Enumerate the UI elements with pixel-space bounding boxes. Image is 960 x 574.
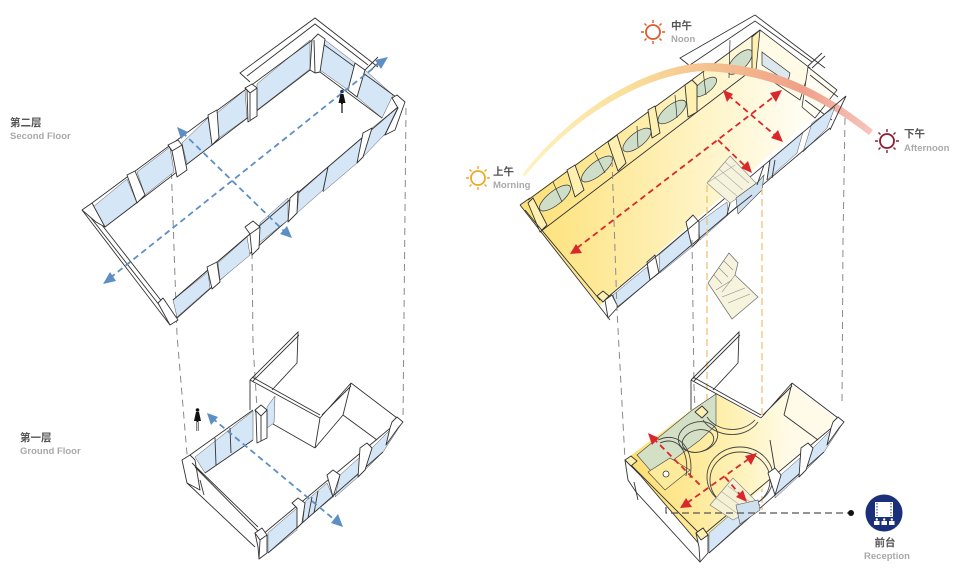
- front wall glazing: [173, 107, 398, 317]
- label: morning: 上午: [493, 165, 514, 178]
- diagram: second floor daylight plan: [520, 15, 873, 320]
- label: noon: 中午: [671, 19, 692, 32]
- back wall piers: [528, 30, 765, 232]
- front wall glazing: [613, 107, 835, 307]
- back wall edge lines: [528, 30, 760, 232]
- wall edge lines: [92, 38, 398, 318]
- left wall: [182, 455, 258, 547]
- icon: reception badge: [866, 494, 902, 532]
- yellow lit floor and back wall: [520, 30, 832, 306]
- dashed circulation arrow: [207, 413, 343, 527]
- back glazing: [190, 396, 275, 473]
- front wall piers: [207, 95, 405, 289]
- callout line: reception: [666, 507, 854, 516]
- heading: ground floor: Ground Floor: [20, 446, 81, 457]
- roof outline strip: [240, 18, 381, 82]
- heading: ground floor: [20, 431, 81, 457]
- label: noon: Noon: [671, 34, 695, 45]
- dashed red arrows: [570, 90, 783, 254]
- label: afternoon: Afternoon: [904, 143, 950, 154]
- dashed red arrows: [648, 433, 757, 508]
- stair and door: [707, 156, 775, 215]
- back wall piers: [127, 34, 365, 203]
- left wall: [625, 456, 700, 562]
- room walls: [691, 377, 838, 470]
- front glazing: [262, 420, 402, 553]
- front piers: [695, 406, 844, 562]
- front wall piers and outer edge: [520, 96, 846, 318]
- label: afternoon: [904, 127, 950, 154]
- icon: afternoon sun: [875, 129, 899, 153]
- icon: noon sun: [641, 20, 665, 44]
- sun arc: [522, 63, 873, 176]
- label: morning: Morning: [493, 180, 531, 191]
- dashed circulation arrows: [103, 57, 388, 284]
- roof outline strip: [520, 15, 825, 320]
- projection lines, right diagrams: [612, 118, 845, 530]
- front piers: [255, 417, 403, 559]
- icon: person: [338, 90, 346, 113]
- end wall and corners: [82, 203, 178, 325]
- label: reception: Reception: [864, 551, 910, 562]
- gray projection lines, left diagrams: [171, 108, 406, 478]
- diagram: ground floor plan: [182, 332, 403, 559]
- heading: second floor: [10, 116, 71, 142]
- heading: second floor: Second Floor: [10, 131, 71, 142]
- partition walls: [691, 332, 740, 410]
- pier: [255, 405, 267, 443]
- diagram: ground floor daylight plan: [625, 332, 844, 562]
- label: morning: [493, 165, 531, 191]
- diagram: loose stair: [708, 253, 758, 319]
- label: afternoon: 下午: [904, 127, 925, 140]
- elliptical windows: [536, 40, 756, 215]
- icon: person: [194, 408, 201, 431]
- heading: second floor: 第二层: [10, 116, 42, 129]
- partition walls: [250, 332, 397, 448]
- icon: morning sun: [466, 166, 490, 190]
- back wall glazing: [93, 40, 393, 227]
- heading: ground floor: 第一层: [20, 431, 52, 444]
- curved rooms: [658, 417, 773, 508]
- label: noon: [671, 19, 695, 45]
- front glazing: [703, 420, 843, 553]
- lit floor: [625, 385, 838, 545]
- diagram: second floor plan: [82, 18, 405, 325]
- stair in floor: [710, 478, 760, 524]
- end window bay: [756, 30, 838, 120]
- label: reception: 前台: [874, 536, 896, 549]
- label: reception: [864, 536, 910, 562]
- white column dot: [663, 471, 669, 477]
